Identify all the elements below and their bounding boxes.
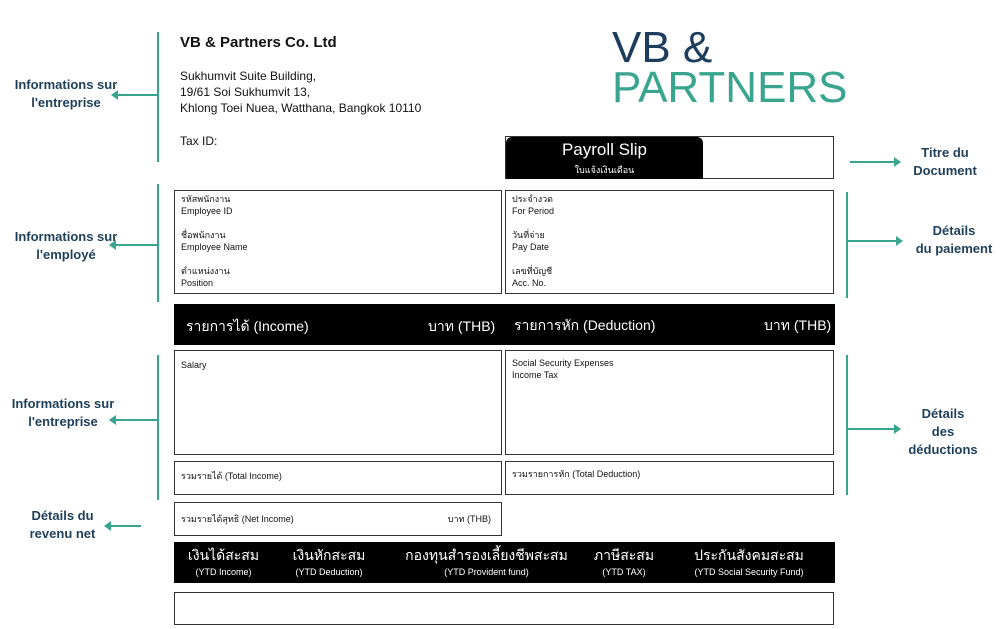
net income: [174, 502, 502, 536]
payment info panel: For Period: [512, 206, 554, 216]
header bar: รายการได้ (Income): [186, 318, 309, 334]
annotation: payment details: du paiement: [916, 241, 992, 256]
deduction panel: Social Security Expenses: [512, 358, 614, 368]
payment info panel: [505, 190, 834, 294]
YTD bar: (YTD Income): [195, 567, 252, 577]
company info: Sukhumvit Suite Building,: [180, 69, 316, 83]
net income: รวมรายได้สุทธิ (Net Income): [181, 514, 294, 524]
YTD bar: [174, 542, 835, 583]
logo: VB &: [612, 23, 712, 72]
annotation: company info: Informations sur l'entreprise: [15, 77, 117, 110]
employee info panel: Employee ID: [181, 206, 233, 216]
annotation: deduction details: [846, 355, 978, 495]
annotation: payment details: Détails: [933, 223, 975, 238]
total deduction: [505, 461, 834, 495]
company info: Khlong Toei Nuea, Watthana, Bangkok 10110: [180, 101, 421, 115]
header bar: [174, 304, 835, 345]
payment info panel: Pay Date: [512, 242, 549, 252]
payment info panel: Acc. No.: [512, 278, 546, 288]
annotation: deduction details: des: [932, 424, 954, 439]
company info: [180, 34, 421, 148]
YTD bar: (YTD Provident fund): [444, 567, 529, 577]
header bar: บาท (THB): [764, 317, 831, 333]
annotation: payment details: [846, 192, 992, 298]
YTD bar: (YTD TAX): [602, 567, 646, 577]
deduction panel: Income Tax: [512, 370, 558, 380]
annotation: net income: Détails du revenu net: [30, 508, 95, 541]
company info: 19/61 Soi Sukhumvit 13,: [180, 85, 310, 99]
title box: Payroll Slip: [562, 140, 647, 159]
YTD bar: (YTD Social Security Fund): [694, 567, 804, 577]
employee info panel: ตำแหน่งงาน: [181, 266, 230, 276]
YTD bar: ภาษีสะสม: [594, 547, 654, 563]
annotation: income details: Informations sur l'entreprise: [12, 396, 114, 429]
logo: [612, 23, 848, 112]
annotation: document title: Titre du Document: [913, 145, 977, 178]
annotation: deduction details: Détails: [922, 406, 964, 421]
net income: บาท (THB): [448, 514, 491, 524]
total deduction: รวมรายการหัก (Total Deduction): [512, 469, 640, 479]
YTD bar: ประกันสังคมสะสม: [694, 547, 804, 563]
employee info panel: ชื่อพนักงาน: [181, 230, 226, 240]
header bar: รายการหัก (Deduction): [514, 317, 655, 333]
payment info panel: วันที่จ่าย: [512, 230, 545, 240]
deduction panel: [505, 350, 834, 455]
total income: [174, 461, 502, 495]
company info: VB & Partners Co. Ltd: [180, 34, 337, 51]
bottom empty box: [174, 592, 834, 625]
employee info panel: [174, 190, 502, 294]
payment info panel: ประจำงวด: [512, 194, 553, 204]
income panel: [174, 350, 502, 455]
income panel: Salary: [181, 360, 207, 370]
total income: รวมรายได้ (Total Income): [181, 471, 282, 481]
header bar: บาท (THB): [428, 318, 495, 334]
employee info panel: รหัสพนักงาน: [181, 194, 230, 204]
employee info panel: Employee Name: [181, 242, 248, 252]
annotation: deduction details: déductions: [908, 442, 978, 457]
company info: Tax ID:: [180, 134, 217, 148]
title box: ใบแจ้งเงินเดือน: [575, 165, 634, 175]
employee info panel: Position: [181, 278, 213, 288]
YTD bar: (YTD Deduction): [295, 567, 363, 577]
logo: PARTNERS: [612, 63, 848, 112]
payment info panel: เลขที่บัญชี: [512, 266, 552, 276]
YTD bar: กองทุนสำรองเลี้ยงชีพสะสม: [405, 547, 568, 563]
YTD bar: เงินได้สะสม: [188, 547, 259, 563]
YTD bar: เงินหักสะสม: [293, 547, 365, 563]
title box: [505, 136, 834, 179]
annotation: employee info: Informations sur l'employé: [15, 229, 117, 262]
